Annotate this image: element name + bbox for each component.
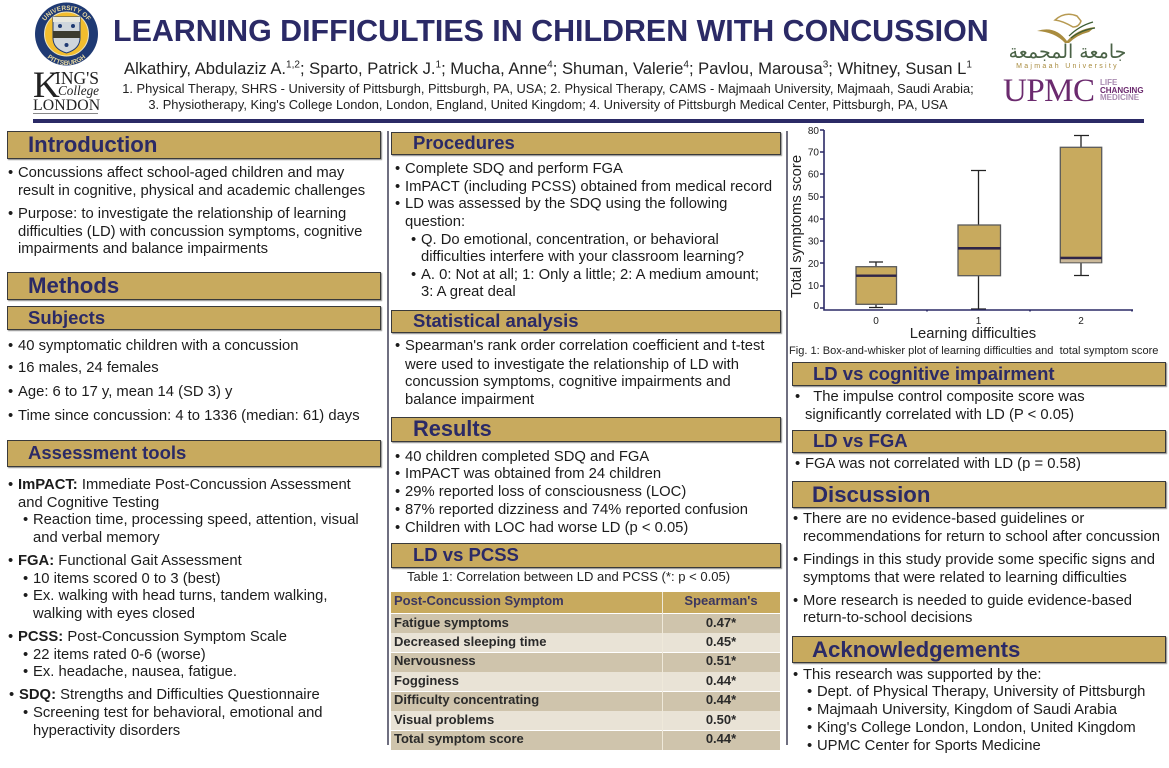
authors: Alkathiry, Abdulaziz A.1,2; Sparto, Patrick J.1; Mucha, Anne4; Shuman, Valerie4; Pavlou, Marousa3; Whitney, Susan L1 <box>124 59 972 78</box>
text: discussion bullets: Findings in this study provide some specific signs and <box>803 552 1155 568</box>
text: results bullets: • <box>395 502 400 518</box>
heading: Discussion: Discussion <box>812 482 930 507</box>
text: acknowledgements bullets: King's College London, London, United Kingdom <box>817 720 1136 736</box>
text: introduction bullets: Purpose: to investigate the relationship of learning <box>18 206 346 222</box>
text: acknowledgements bullets: This research was supported by the: <box>803 667 1042 683</box>
table: correlation between LD and PCSS: 0.44* <box>706 692 736 707</box>
text: assessment tools bullets: • <box>23 571 28 587</box>
text: procedures bullets: Q. Do emotional, concentration, or behavioral <box>421 232 719 248</box>
logo: UPMC: LIFE <box>1100 78 1117 87</box>
text: statistical analysis bullets: • <box>395 338 400 354</box>
text: assessment tools bullets: • <box>9 687 14 703</box>
y tick labels: 80 <box>808 126 819 137</box>
heading: Introduction <box>7 131 381 159</box>
text: results bullets: • <box>395 484 400 500</box>
text: discussion bullets: • <box>793 552 798 568</box>
chart: box-and-whisker plot <box>789 126 1133 342</box>
text: cognitive impairment finding <box>795 389 1085 423</box>
text: results bullets: • <box>395 449 400 465</box>
text: introduction bullets: impairments and balance impairments <box>18 241 268 257</box>
heading: Results <box>391 417 781 442</box>
text: assessment tools bullets: • <box>23 705 28 721</box>
text: introduction bullets: • <box>8 165 13 181</box>
text: statistical analysis bullets: Spearman's rank order correlation coefficient and t-test <box>405 338 765 354</box>
y tick labels: 40 <box>808 214 819 226</box>
text: results bullets: 40 children completed SDQ and FGA <box>405 449 649 465</box>
text: assessment tools bullets: SDQ: Strengths and Difficulties Questionnaire <box>19 687 320 703</box>
text: cognitive impairment finding: The impulse control composite score was <box>813 389 1085 405</box>
heading: LD vs PCSS <box>391 543 781 568</box>
heading: Statistical analysis <box>391 310 781 333</box>
text: introduction bullets: result in cognitive, physical and academic challenges <box>18 183 365 199</box>
text: assessment tools bullets: • <box>23 664 28 680</box>
text: FGA finding: FGA was not correlated with LD (p = 0.58) <box>805 456 1081 472</box>
text: results bullets: Children with LOC had worse LD (p < 0.05) <box>405 520 688 536</box>
text: assessment tools bullets: and verbal memory <box>33 530 160 546</box>
heading: Methods <box>7 272 381 300</box>
text: acknowledgements bullets: Majmaah University, Kingdom of Saudi Arabia <box>817 702 1117 718</box>
text: statistical analysis bullets: were used to investigate the relationship of LD with <box>405 357 739 373</box>
text: acknowledgements bullets: • <box>807 720 812 736</box>
heading: Methods: Methods <box>28 273 119 298</box>
heading: Procedures <box>391 132 781 155</box>
text: acknowledgements bullets: UPMC Center for Sports Medicine <box>817 738 1041 754</box>
table: correlation between LD and PCSS: 0.47* <box>706 615 736 630</box>
logo: King's College London: LONDON <box>33 97 100 114</box>
text: results bullets: ImPACT was obtained from 24 children <box>405 466 661 482</box>
affiliations <box>122 81 974 112</box>
text: discussion bullets: • <box>793 511 798 527</box>
x tick labels: 1 <box>976 316 982 327</box>
text: acknowledgements bullets: Dept. of Physical Therapy, University of Pittsburgh <box>817 684 1145 700</box>
text: assessment tools bullets: • <box>8 477 13 493</box>
text: subjects bullets: 16 males, 24 females <box>18 360 159 376</box>
text: results bullets: • <box>395 466 400 482</box>
text: procedures bullets: • <box>395 179 400 195</box>
text: introduction bullets <box>8 165 365 257</box>
text: discussion bullets: • <box>793 593 798 609</box>
figure caption: Fig. 1: Box-and-whisker plot of learning difficulties and total symptom score <box>789 345 1158 357</box>
table: correlation between LD and PCSS: Decreased sleeping time <box>394 634 546 649</box>
heading: Statistical analysis: Statistical analysis <box>413 310 579 331</box>
logo: University of Pittsburgh seal <box>35 2 98 66</box>
text: cognitive impairment finding: significantly correlated with LD (P < 0.05) <box>805 407 1074 423</box>
text: assessment tools bullets: hyperactivity disorders <box>33 723 180 739</box>
text: acknowledgements bullets: • <box>807 702 812 718</box>
y tick labels: 0 <box>813 301 819 312</box>
logo: University of Pittsburgh seal: PITTSBURGH <box>48 54 86 65</box>
text: assessment tools bullets: Ex. walking with head turns, tandem walking, <box>33 588 327 604</box>
logo: Majmaah University: Majmaah University <box>1016 63 1119 70</box>
y tick labels: 50 <box>808 192 819 203</box>
text: procedures bullets <box>395 161 772 300</box>
text: procedures bullets: LD was assessed by the SDQ using the following <box>405 196 727 212</box>
text: discussion bullets: return-to-school decisions <box>803 610 972 626</box>
affiliations: 1. Physical Therapy, SHRS - University of Pittsburgh, Pittsburgh, PA, USA; 2. Physical Therapy, CAMS - Majmaah University, Majmaah, Saudi Arabia; <box>122 81 974 96</box>
text: acknowledgements bullets <box>793 667 1145 754</box>
text: assessment tools bullets: and Cognitive Testing <box>18 495 159 511</box>
text: introduction bullets: Concussions affect school-aged children and may <box>18 165 344 181</box>
text: assessment tools bullets: 10 items scored 0 to 3 (best) <box>33 571 221 587</box>
table: correlation between LD and PCSS: Fatigue symptoms <box>394 615 509 630</box>
text: introduction bullets: difficulties (LD) with concussion symptoms, cognitive <box>18 224 362 240</box>
text: procedures bullets: • <box>395 196 400 212</box>
title: LEARNING DIFFICULTIES IN CHILDREN WITH CONCUSSION <box>113 14 989 48</box>
text: statistical analysis bullets: balance impairment <box>405 392 534 408</box>
table: correlation between LD and PCSS: Visual problems <box>394 712 494 727</box>
text: statistical analysis bullets: concussion symptoms, cognitive impairments and <box>405 374 731 390</box>
logo: UPMC: MEDICINE <box>1100 93 1139 102</box>
y tick labels: 10 <box>808 281 819 292</box>
text: acknowledgements bullets: • <box>793 667 798 683</box>
text: procedures bullets: • <box>395 161 400 177</box>
text: procedures bullets: A. 0: Not at all; 1: Only a little; 2: A medium amount; <box>421 267 759 283</box>
text: subjects bullets: • <box>8 408 13 424</box>
text: subjects bullets: • <box>8 360 13 376</box>
x tick labels: 2 <box>1078 316 1084 327</box>
logo: University of Pittsburgh seal: UNIVERSITY OF <box>42 6 92 20</box>
text: procedures bullets: 3: A great deal <box>421 284 516 300</box>
text: procedures bullets: Complete SDQ and perform FGA <box>405 161 623 177</box>
y tick labels: 60 <box>808 170 819 180</box>
table: correlation between LD and PCSS <box>391 592 780 750</box>
text: results bullets <box>395 449 748 536</box>
text: discussion bullets: There are no evidence-based guidelines or <box>803 511 1084 527</box>
table: correlation between LD and PCSS: 0.50* <box>706 712 736 727</box>
text: assessment tools bullets: • <box>8 553 13 569</box>
text: procedures bullets: • <box>411 232 416 248</box>
text: assessment tools bullets: walking with eyes closed <box>33 606 195 622</box>
y tick labels: 70 <box>808 148 819 158</box>
text: subjects bullets: Time since concussion: 4 to 1336 (median: 61) days <box>18 408 360 424</box>
text: assessment tools bullets <box>8 477 359 739</box>
heading: Discussion <box>792 481 1166 508</box>
text: discussion bullets: recommendations for return to school after concussion <box>803 529 1160 545</box>
box: LD 0 <box>856 267 896 304</box>
heading: LD vs cognitive impairment <box>792 362 1166 386</box>
text: assessment tools bullets: • <box>23 647 28 663</box>
table: correlation between LD and PCSS: 0.45* <box>706 634 736 649</box>
text: acknowledgements bullets: • <box>807 738 812 754</box>
logo: Majmaah University: جامعة المجمعة <box>1009 41 1126 63</box>
text: assessment tools bullets: Screening test for behavioral, emotional and <box>33 705 323 721</box>
text: assessment tools bullets: • <box>23 588 28 604</box>
text: results bullets: 87% reported dizziness and 74% reported confusion <box>405 502 748 518</box>
heading: Subjects <box>7 306 381 330</box>
heading: LD vs FGA <box>792 430 1166 453</box>
heading: Subjects: Subjects <box>28 307 105 328</box>
y tick labels: 30 <box>808 236 819 248</box>
table: correlation between LD and PCSS: Total symptom score <box>394 731 524 746</box>
affiliations: 3. Physiotherapy, King's College London, London, England, United Kingdom; 4. University of Pittsburgh Medical Center, Pittsburgh, PA, USA <box>148 97 948 112</box>
heading: Results: Results <box>413 416 492 441</box>
text: results bullets: 29% reported loss of consciousness (LOC) <box>405 484 686 500</box>
text: subjects bullets: 40 symptomatic children with a concussion <box>18 338 298 354</box>
text: assessment tools bullets: • <box>8 629 13 645</box>
table: correlation between LD and PCSS: 0.51* <box>706 653 736 668</box>
logo: King's College London: College <box>58 83 99 98</box>
table: correlation between LD and PCSS: 0.44* <box>706 673 736 688</box>
logo: King's College London: ING'S <box>55 68 99 88</box>
text: procedures bullets: • <box>411 267 416 283</box>
x tick labels <box>873 316 1084 327</box>
heading: Procedures: Procedures <box>413 132 515 153</box>
text: subjects bullets: Age: 6 to 17 y, mean 14 (SD 3) y <box>18 384 232 400</box>
text: subjects bullets: • <box>8 338 13 354</box>
text: acknowledgements bullets: • <box>807 684 812 700</box>
column divider left <box>387 131 388 745</box>
x tick labels: 0 <box>873 316 879 327</box>
text: procedures bullets: difficulties interfere with your classroom learning? <box>421 249 744 265</box>
text: statistical analysis bullets <box>395 338 765 408</box>
text: assessment tools bullets: 22 items rated 0-6 (worse) <box>33 647 206 663</box>
text: discussion bullets: More research is needed to guide evidence-based <box>803 593 1132 609</box>
text: cognitive impairment finding: • <box>795 389 800 405</box>
text: discussion bullets: symptoms that were related to learning difficulties <box>803 570 1127 586</box>
text: subjects bullets: • <box>8 384 13 400</box>
text: assessment tools bullets: ImPACT: Immediate Post-Concussion Assessment <box>18 477 351 493</box>
heading: Introduction: Introduction <box>28 132 157 157</box>
logo: Majmaah University <box>1009 14 1126 70</box>
heading: Acknowledgements <box>792 636 1166 663</box>
logo: King's College London <box>33 65 100 114</box>
logo: King's College London: K <box>33 65 60 106</box>
y tick labels <box>808 126 819 312</box>
heading: Assessment tools: Assessment tools <box>28 442 186 463</box>
heading: LD vs FGA: LD vs FGA <box>813 430 908 451</box>
text: assessment tools bullets: Ex. headache, nausea, fatigue. <box>33 664 237 680</box>
text: procedures bullets: question: <box>405 214 465 230</box>
box: LD 1 <box>958 225 1000 276</box>
logo: UPMC <box>1003 73 1144 109</box>
text: introduction bullets: • <box>8 206 13 222</box>
y axis title: Total symptoms score <box>789 155 805 298</box>
heading: Acknowledgements: Acknowledgements <box>812 637 1020 662</box>
header rule <box>33 119 1144 123</box>
x axis title: Learning difficulties <box>910 326 1036 342</box>
table: correlation between LD and PCSS: Fogginess <box>394 673 459 688</box>
text: assessment tools bullets: • <box>23 512 28 528</box>
y tick labels: 20 <box>808 259 819 270</box>
text: assessment tools bullets: FGA: Functional Gait Assessment <box>18 553 242 569</box>
table: correlation between LD and PCSS: Difficulty concentrating <box>394 692 539 707</box>
heading: LD vs cognitive impairment: LD vs cognitive impairment <box>813 363 1055 384</box>
column divider right <box>786 131 788 745</box>
text: discussion bullets <box>793 511 1160 626</box>
heading: Assessment tools <box>7 440 381 467</box>
text: subjects bullets <box>8 338 360 424</box>
logo: UPMC: CHANGING <box>1100 86 1144 94</box>
table caption: Table 1: Correlation between LD and PCSS (*: p < 0.05) <box>407 569 730 584</box>
text: FGA finding: • <box>795 456 800 472</box>
table: correlation between LD and PCSS: Post-Concussion Symptom <box>394 593 564 608</box>
box: LD 2 <box>1060 147 1102 263</box>
text: results bullets: • <box>395 520 400 536</box>
table: correlation between LD and PCSS: Nervousness <box>394 653 476 668</box>
table: correlation between LD and PCSS: Spearman's <box>684 593 758 608</box>
text: procedures bullets: ImPACT (including PCSS) obtained from medical record <box>405 179 772 195</box>
table: correlation between LD and PCSS: 0.44* <box>706 731 736 746</box>
text: assessment tools bullets: Reaction time, processing speed, attention, visual <box>33 512 359 528</box>
axes <box>820 130 1133 312</box>
logo: UPMC: UPMC <box>1003 73 1095 109</box>
heading: LD vs PCSS: LD vs PCSS <box>413 544 519 565</box>
text: assessment tools bullets: PCSS: Post-Concussion Symptom Scale <box>18 629 287 645</box>
